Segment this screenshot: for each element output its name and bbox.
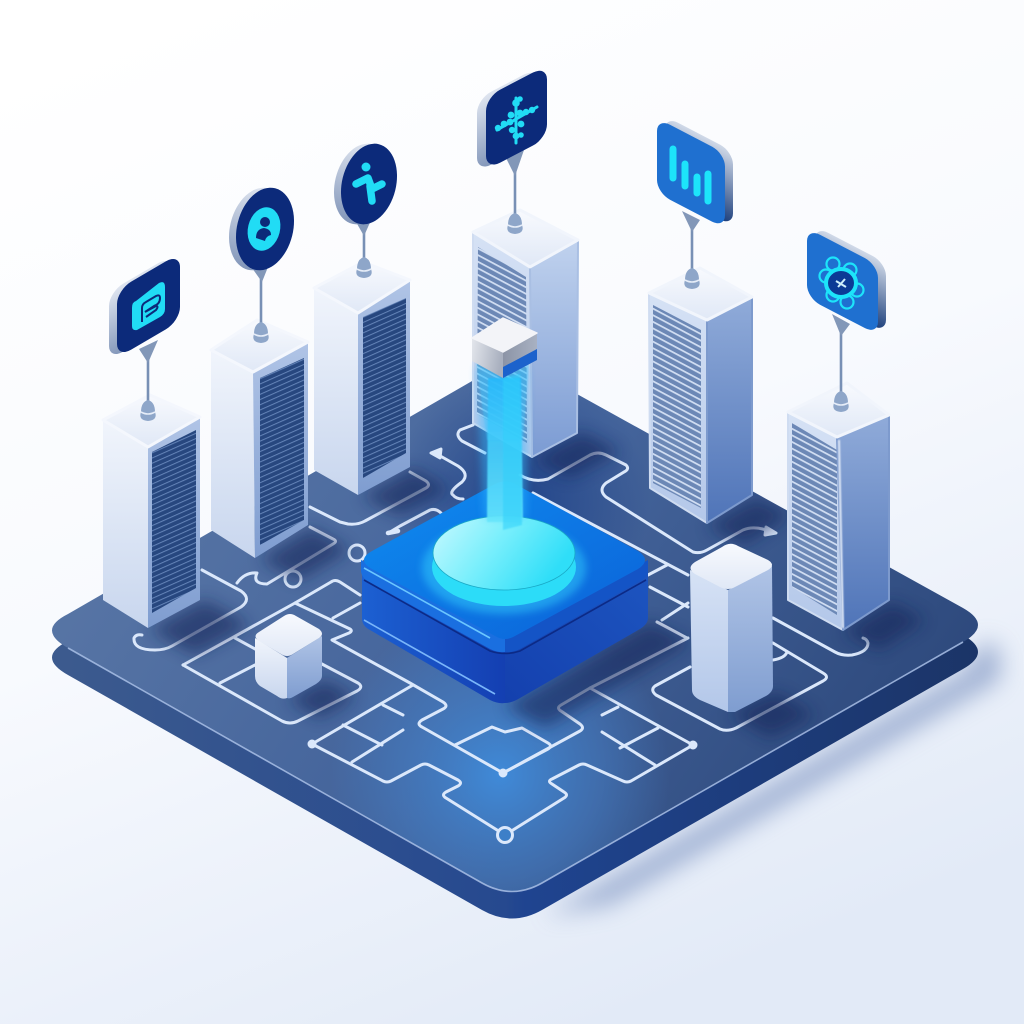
top face [788,383,889,437]
disc lower rim [432,528,576,606]
circle glyph [243,204,285,254]
right face [358,280,410,495]
right face [707,297,752,523]
base rim highlight [364,620,495,694]
sign edge [665,116,733,226]
connector cone [252,262,270,282]
vent [653,305,701,508]
right face [837,415,889,630]
left face [690,570,728,712]
top face [364,482,645,639]
server tower 4 (back centre) [473,210,578,457]
right face [530,240,578,457]
platform [52,358,978,918]
pole base [140,400,156,421]
right face [253,342,308,558]
dotted cross glyph [495,96,537,143]
top face [649,268,752,320]
light beam [476,362,529,530]
small block right [690,544,773,712]
vent [152,430,196,613]
platform drop shadow [545,640,1000,915]
sign edge [477,67,538,172]
lower right side [505,565,648,703]
pole base [507,213,523,234]
left face [103,420,148,628]
left face [649,293,707,523]
server tower 3 [314,262,410,495]
sign face [228,181,302,277]
left face [473,232,532,457]
vent [477,247,527,443]
network glyph [820,258,864,308]
pole [691,225,693,270]
chat glyph [132,282,165,330]
left face [211,350,255,558]
sign face [657,118,725,228]
connector cone [682,211,700,232]
sign face [333,138,405,230]
sign edge [221,181,295,277]
connector cone [139,340,158,363]
top face [473,210,578,267]
lid side right [505,560,648,652]
lid side left [361,560,505,652]
bars glyph [673,149,708,201]
right face [287,636,322,698]
vent [363,298,406,478]
right face [503,333,537,378]
pin and sign 1: chat icon [109,253,180,421]
top face [314,262,410,313]
top face [690,544,772,589]
sign face [486,65,547,170]
top face [211,320,308,372]
arrowhead right [765,527,776,535]
front edge highlight [529,270,531,455]
pole [260,278,262,330]
pole base [253,322,269,343]
connector cone [832,314,850,336]
left face [788,412,843,630]
beam core [503,374,522,530]
server tower 2 [211,320,308,558]
vent [792,423,837,615]
arrowhead left [431,449,441,458]
disc glow [422,522,586,614]
server tower 1 [103,395,200,628]
pole base [356,257,372,278]
sign edge [815,226,886,333]
sign face [807,228,878,335]
connector cone [356,218,372,236]
sign edge [109,255,172,360]
pin and sign 6: flower network icon [807,226,886,412]
figure glyph [356,162,382,201]
pole base [684,268,700,289]
right face [728,566,773,712]
pin and sign 3: figure icon [326,138,405,278]
top face [256,614,322,656]
small cube left [255,614,322,699]
beam outer glow [476,368,528,518]
front edge highlight [706,323,708,520]
pin and sign 5: bar chart icon [657,116,733,289]
platform top surface [52,358,978,892]
top face [472,318,537,352]
glowing disc [422,516,586,614]
pole [840,330,842,396]
pole [147,350,149,408]
front edge highlight [839,440,843,628]
pin and sign 4: dotted cross icon [477,65,547,234]
right face [148,417,200,628]
lower left side [362,565,505,703]
tower shadows on platform [150,432,925,738]
left face [314,288,358,495]
top face [103,395,200,447]
circuit traces [134,425,868,842]
sign edge [326,138,398,230]
left face [255,638,287,699]
blue underside band [503,349,537,378]
server tower 6 [788,383,889,630]
beam column [487,378,523,522]
central blue base [361,482,648,703]
disc top surface [433,516,575,590]
lid seam [364,580,646,654]
pin and sign 2: person bubble icon [221,181,302,343]
pole [363,222,365,264]
vent [260,358,304,545]
sign face [117,253,180,358]
emitter head [472,318,537,378]
server tower 5 [649,268,752,523]
platform side [52,385,978,918]
beam translucent upper [476,362,529,440]
pole [514,165,516,220]
pole base [833,391,849,412]
left face [472,338,503,378]
top edge highlight [364,568,490,638]
connector cone [506,150,524,176]
